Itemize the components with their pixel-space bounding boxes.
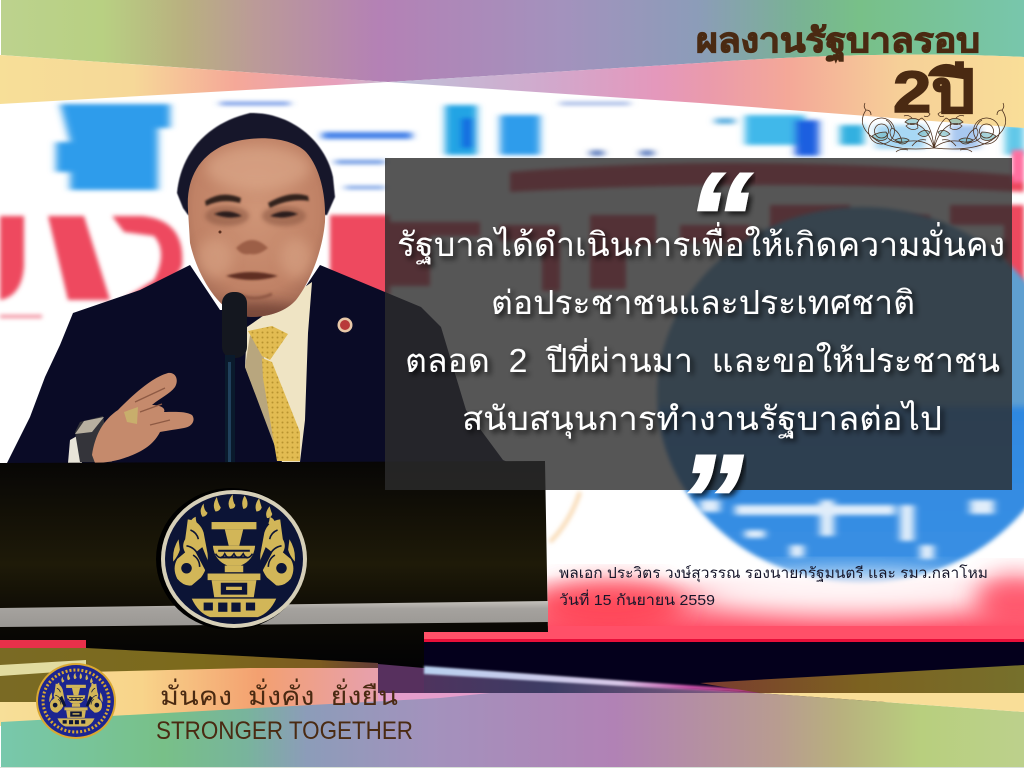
dark tinted ribbon right <box>700 665 1024 693</box>
shirt cuff <box>68 436 82 463</box>
face shading <box>197 146 312 334</box>
tie <box>248 326 300 461</box>
top colour band <box>0 0 1024 128</box>
pink strip <box>378 693 490 702</box>
quote text: รัฐบาลได้ดำเนินการเพื่อให้เกิดความมั่นคง <box>397 222 1005 265</box>
slogan: มั่นคง มั่งคั่ง ยั่งยืน <box>160 678 398 711</box>
bottom colour band <box>0 648 1024 768</box>
quote panel <box>385 145 1012 573</box>
caption: speaker and date: พลเอก ประวิตร วงษ์สุวรรณ รองนายกรัฐมนตรี และ รมว.กลาโหม <box>559 564 988 583</box>
stage streak <box>424 668 760 693</box>
podium silver strip <box>0 601 548 627</box>
closing quote mark: ” <box>677 427 743 573</box>
title: ผลงานรัฐบาลรอบ 2 ปี <box>696 22 980 125</box>
hand <box>92 373 194 463</box>
title: ผลงานรัฐบาลรอบ 2 ปี: 2ปี <box>893 60 975 125</box>
suit jacket <box>7 265 510 463</box>
microphone <box>222 292 247 358</box>
quote text: สนับสนุนการทำงานรัฐบาลต่อไป <box>462 400 942 439</box>
facial features <box>205 194 309 298</box>
ring <box>124 407 138 424</box>
quote text: ต่อประชาชนและประเทศชาติ <box>491 284 915 321</box>
person: speaker at the podium <box>7 113 510 463</box>
secondary ribbon: yellow and pink <box>0 55 388 104</box>
shirt collar <box>245 282 312 462</box>
caption: speaker and date <box>559 564 988 609</box>
podium seal <box>156 488 307 630</box>
slogan: STRONGER TOGETHER <box>156 717 413 745</box>
quote text <box>397 222 1005 439</box>
podium <box>0 461 548 668</box>
caption: speaker and date: วันที่ 15 กันยายน 2559 <box>559 589 715 609</box>
hair <box>177 113 335 215</box>
bright ribbon over stage <box>0 668 440 726</box>
quote text: ตลอด 2 ปีที่ผ่านมา และขอให้ประชาชน <box>405 338 1000 379</box>
face <box>188 138 325 317</box>
slogan <box>156 678 413 745</box>
teal to green ribbon <box>1 693 1024 767</box>
ornament under the title <box>862 103 1006 152</box>
opening quote mark: “ <box>686 145 752 291</box>
wristwatch <box>75 416 112 462</box>
lapel pin <box>338 318 352 332</box>
emblem: government seal logo <box>36 663 116 739</box>
title: ผลงานรัฐบาลรอบ 2 ปี: ผลงานรัฐบาลรอบ <box>696 22 980 63</box>
dark tinted ribbon left <box>0 648 378 702</box>
